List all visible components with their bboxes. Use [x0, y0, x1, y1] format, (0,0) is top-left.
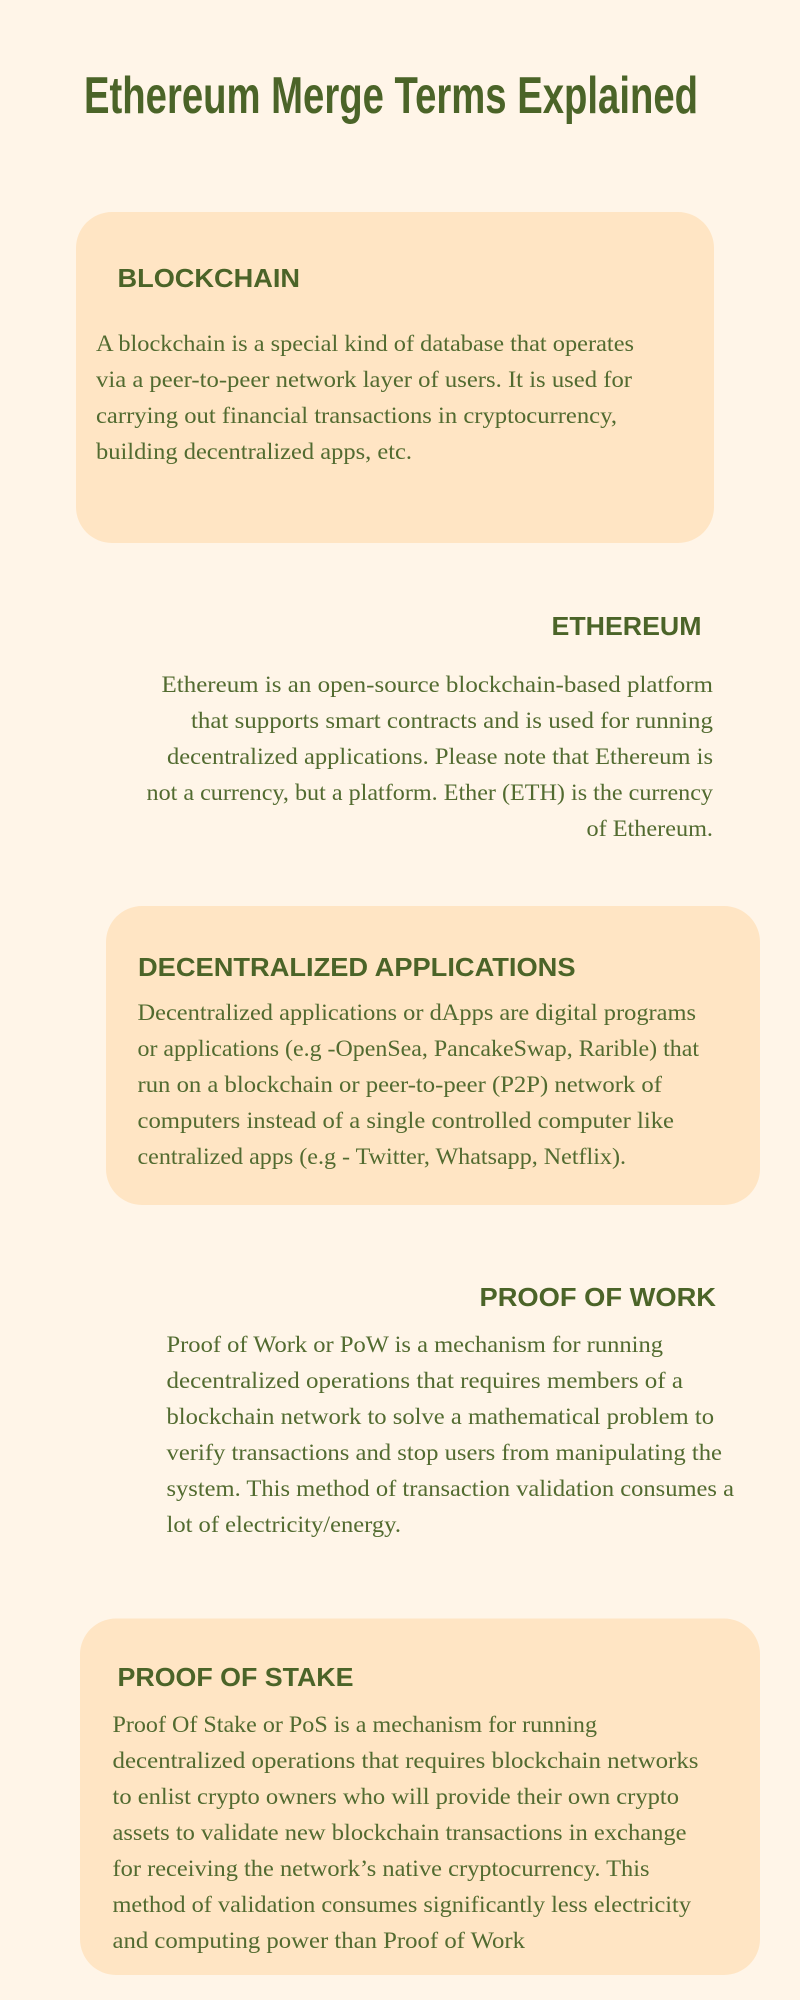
- text block: decentralized applications definition: Decentralized applications or dApps are digital programs: [138, 1000, 696, 1025]
- heading: ethereum: ETHEREUM: [552, 611, 702, 641]
- text block: blockchain definition: via a peer-to-peer network layer of users. It is used for: [96, 367, 632, 392]
- text block: proof of stake definition: and computing power than Proof of Work: [112, 1928, 526, 1953]
- text block: ethereum definition: [146, 672, 714, 841]
- panel: ethereum: [146, 611, 714, 841]
- text block: decentralized applications definition: computers instead of a single controlled computer like: [138, 1108, 674, 1133]
- text block: proof of stake definition: to enlist crypto owners who will provide their own crypto: [112, 1784, 679, 1809]
- text block: proof of stake definition: [112, 1712, 699, 1953]
- text block: proof of work definition: lot of electricity/energy.: [166, 1512, 401, 1537]
- text block: ethereum definition: Ethereum is an open-source blockchain-based platform: [162, 672, 713, 697]
- text block: decentralized applications definition: centralized apps (e.g - Twitter, Whatsapp, Netflix).: [138, 1144, 626, 1169]
- text block: proof of stake definition: method of validation consumes significantly less electricity: [112, 1892, 692, 1917]
- text block: proof of work definition: [166, 1332, 734, 1537]
- panel: decentralized applications: [106, 906, 760, 1205]
- panel: blockchain: [76, 212, 714, 543]
- text block: decentralized applications definition: run on a blockchain or peer-to-peer (P2P) network of: [138, 1072, 662, 1097]
- card background: blockchain: [76, 212, 714, 543]
- text block: ethereum definition: decentralized applications. Please note that Ethereum is: [167, 744, 713, 769]
- text block: proof of stake definition: assets to validate new blockchain transactions in exchange: [112, 1820, 686, 1845]
- text block: blockchain definition: carrying out financial transactions in cryptocurrency,: [96, 403, 617, 428]
- text block: proof of stake definition: for receiving the network’s native cryptocurrency. This: [112, 1856, 650, 1881]
- heading: proof of work: PROOF OF WORK: [480, 1282, 716, 1312]
- text block: ethereum definition: that supports smart contracts and is used for running: [191, 708, 714, 733]
- heading: proof of stake: PROOF OF STAKE: [118, 1662, 354, 1692]
- card background: decentralized applications: [106, 906, 760, 1205]
- text block: proof of work definition: system. This method of transaction validation consumes a: [166, 1476, 734, 1501]
- heading: blockchain: BLOCKCHAIN: [118, 263, 300, 293]
- text block: proof of work definition: blockchain network to solve a mathematical problem to: [166, 1404, 714, 1429]
- text block: decentralized applications definition: [138, 1000, 700, 1169]
- text block: blockchain definition: building decentralized apps, etc.: [96, 439, 412, 464]
- text block: proof of work definition: verify transactions and stop users from manipulating the: [166, 1440, 722, 1465]
- text block: proof of stake definition: Proof Of Stake or PoS is a mechanism for running: [112, 1712, 598, 1737]
- text block: proof of work definition: decentralized operations that requires members of a: [166, 1368, 683, 1393]
- text block: ethereum definition: not a currency, but a platform. Ether (ETH) is the currency: [146, 780, 714, 805]
- heading: decentralized applications: DECENTRALIZED APPLICATIONS: [138, 952, 576, 982]
- text block: ethereum definition: of Ethereum.: [586, 816, 713, 841]
- text block: proof of stake definition: decentralized operations that requires blockchain networks: [112, 1748, 699, 1773]
- panel: proof of work: [166, 1282, 734, 1537]
- text block: blockchain definition: A blockchain is a special kind of database that operates: [96, 331, 634, 356]
- text block: blockchain definition: [96, 331, 634, 464]
- text block: proof of work definition: Proof of Work or PoW is a mechanism for running: [166, 1332, 664, 1357]
- panel: proof of stake: [80, 1618, 760, 1975]
- card background: proof of stake: [80, 1618, 760, 1975]
- text block: decentralized applications definition: or applications (e.g -OpenSea, PancakeSwap, Rarible) that: [138, 1036, 700, 1061]
